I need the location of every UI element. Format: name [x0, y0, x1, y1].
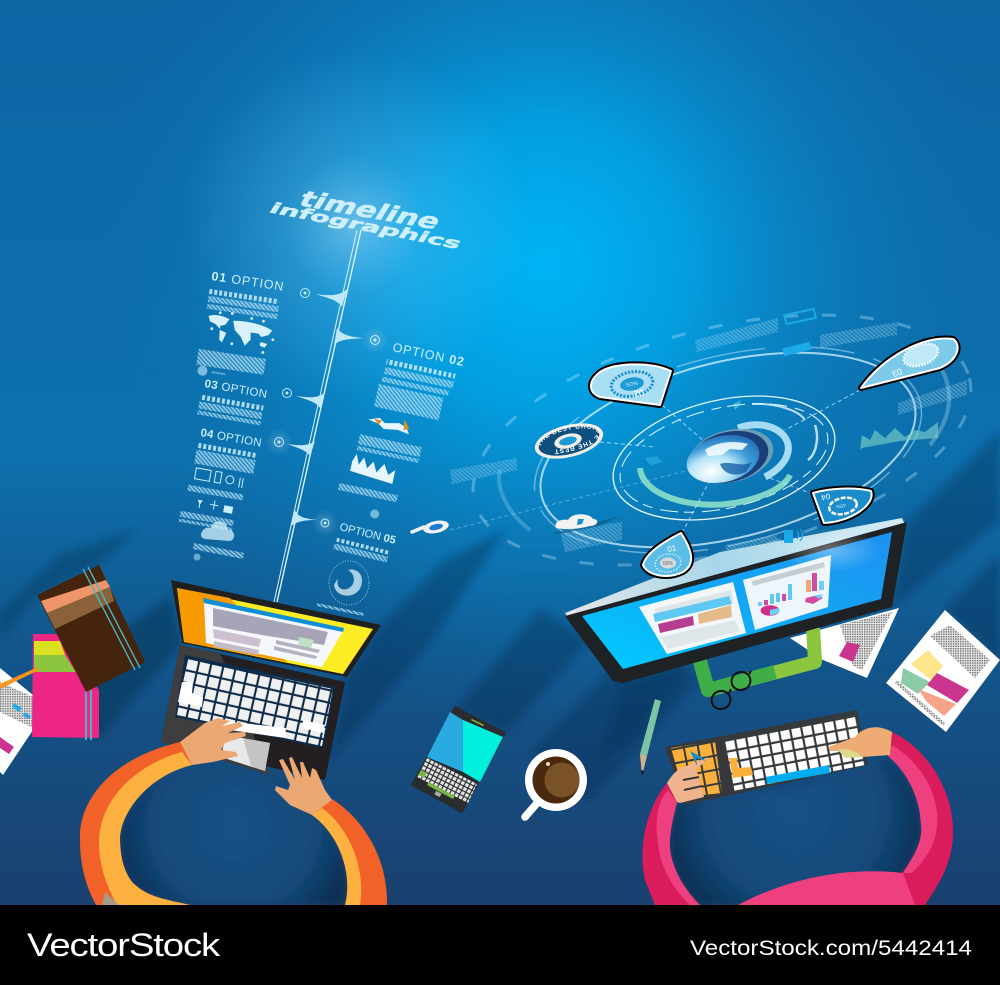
- left arm: [642, 783, 700, 905]
- laptop screen: [177, 588, 373, 674]
- radar panel: [410, 308, 972, 566]
- option 01: [195, 269, 285, 386]
- pencil: [640, 699, 661, 776]
- brown book: [37, 565, 145, 692]
- option 03: [197, 378, 268, 426]
- url: VectorStock.com/5442414: [690, 937, 972, 960]
- inner ring: [601, 376, 847, 540]
- small icons: [197, 498, 234, 514]
- timeline panel: [179, 187, 466, 616]
- monitor stand: [699, 628, 815, 690]
- coffee cup: [525, 749, 587, 817]
- left hand on keypad: [667, 757, 708, 803]
- monitor screen: [582, 532, 892, 669]
- laptop lid: [171, 580, 381, 677]
- right window with charts: [743, 555, 831, 630]
- phone icon: [784, 529, 802, 543]
- desktop keyboard: [665, 710, 868, 805]
- option nodes: [265, 288, 389, 537]
- magnifier: [412, 518, 450, 536]
- laptop keyboard: [175, 655, 335, 748]
- title: timeline infographics: timeline: [294, 187, 446, 235]
- pin 01: [643, 533, 691, 576]
- smartphone: [412, 707, 505, 812]
- cloud icon: [201, 521, 234, 541]
- document: [886, 610, 1000, 732]
- right arm: [880, 732, 953, 905]
- monitor: [565, 518, 907, 683]
- option 05: [333, 521, 397, 563]
- pin 01: 01: [667, 543, 678, 554]
- brand: VectorStock: [27, 927, 221, 963]
- world map: [204, 309, 277, 355]
- badge: the best choice: THE BEST CHOICE THE BEST: [536, 424, 601, 454]
- right sleeve: [312, 799, 387, 905]
- pin 04: [813, 489, 872, 523]
- left sleeve: [80, 742, 192, 905]
- outer ring: [513, 311, 943, 589]
- pin 04: 40%: [835, 502, 846, 509]
- chart: orange area: [367, 412, 412, 434]
- pin 04: 04: [820, 492, 831, 502]
- right hand on keyboard: [828, 727, 892, 758]
- paper behind monitor: [790, 608, 899, 678]
- pin 01: 50%: [663, 561, 674, 567]
- small blue icons: [645, 309, 816, 465]
- glasses: [709, 669, 753, 712]
- pin 02: [591, 364, 671, 405]
- option 05: OPTION 05: [338, 521, 397, 547]
- pin 02: 50%: [626, 381, 639, 389]
- timeline axis: [274, 230, 361, 602]
- laptop: [161, 580, 381, 780]
- footer: [0, 905, 1000, 985]
- line chart: [860, 422, 938, 450]
- left paper: [0, 668, 33, 775]
- pushpin: [690, 751, 706, 766]
- torso shadow: laptop user: [120, 765, 347, 905]
- option 02: [334, 335, 466, 530]
- device icons: [194, 468, 244, 488]
- monitor rear: [565, 518, 906, 618]
- torso: [738, 871, 915, 905]
- pin 02: 02: [633, 388, 645, 399]
- option 02: OPTION 02: [391, 340, 466, 369]
- cloud badge: [550, 514, 620, 534]
- pin 03: [861, 338, 958, 388]
- desktop user: [642, 732, 953, 905]
- hatched notes: [193, 543, 244, 560]
- hatched data strips: [450, 318, 967, 565]
- pink book: [32, 634, 99, 740]
- laptop base: [161, 645, 345, 780]
- option 04: 04 OPTION: [199, 427, 263, 450]
- pencil on paper: [0, 667, 39, 689]
- swirl emblem: [329, 561, 369, 605]
- connector lines: [450, 390, 860, 533]
- monitor bezel: [565, 522, 907, 683]
- left hand: [180, 718, 246, 765]
- option 01: 01 OPTION: [211, 269, 285, 294]
- globe: [682, 420, 779, 492]
- right hand: [275, 757, 332, 815]
- chart: white area: [349, 453, 397, 484]
- hatch under swirl: [317, 603, 364, 616]
- title: timeline infographics: [266, 187, 465, 252]
- title: timeline infographics: infographics: [266, 200, 465, 252]
- touchpad: [221, 738, 270, 771]
- option 03: 03 OPTION: [203, 378, 268, 401]
- option 04: [179, 426, 263, 533]
- torso shadow: desktop user: [670, 756, 921, 905]
- outer dashed ring: [447, 270, 997, 610]
- laptop user: [80, 718, 387, 905]
- left window: [639, 582, 746, 654]
- monitor glare: [780, 528, 880, 572]
- pin 03: 03: [891, 366, 904, 379]
- diagonal shadows: [0, 430, 1000, 800]
